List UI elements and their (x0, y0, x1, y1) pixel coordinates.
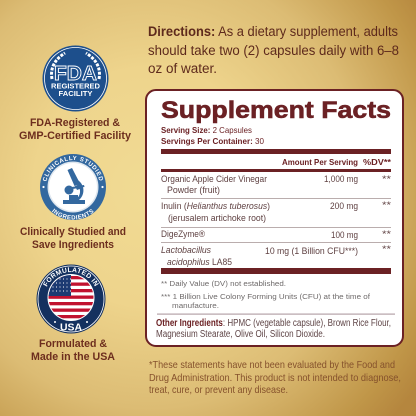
footnotes: *** 1 Billion Live Colony Forming Units (CFU) at the time of (161, 294, 370, 301)
heading: supplement facts: Supplement Facts (161, 97, 391, 124)
table: ingredients: 100 mg (331, 230, 358, 241)
table: ingredients: 1,000 mg (324, 174, 358, 185)
badge: FDA registered facility: REGISTERED (51, 82, 101, 90)
caption: clinically studied: Clinically Studied and (20, 226, 126, 238)
caption: FDA registered: GMP-Certified Facility (19, 130, 132, 142)
icon: microscope (63, 168, 85, 204)
table: ingredients: 10 mg (1 Billion CFU***) (265, 246, 358, 257)
directions text: should take two (2) capsules daily with 6–8 (148, 43, 399, 58)
table: ingredients: Amount Per Serving (282, 157, 358, 167)
table: ingredients: ** (382, 229, 391, 240)
directions text: Directions: As a dietary supplement, adults (148, 24, 398, 39)
other ingredients: Magnesium Stearate, Olive Oil, Silicon Dioxide. (156, 329, 325, 340)
icon: US flag (48, 275, 94, 318)
caption: FDA registered: FDA-Registered & (30, 117, 120, 129)
badge: clinically studied ingredients: CLINICALLY STUDIED (42, 156, 103, 181)
serving info: Servings Per Container: 30 (161, 136, 264, 146)
badge: FDA registered facility: FDA (54, 63, 97, 85)
badge: formulated in USA (36, 264, 106, 334)
directions text (148, 24, 399, 76)
panel: supplement facts (146, 90, 403, 346)
table: ingredients (161, 149, 392, 274)
caption: clinically studied: Save Ingredients (32, 239, 114, 251)
caption: formulated in USA: Made in the USA (31, 351, 115, 363)
footnotes (161, 281, 370, 310)
table: ingredients: Inulin (Helianthus tuberosus) (161, 201, 270, 212)
disclaimer: treat, cure, or prevent any disease. (149, 384, 288, 396)
badge: formulated in USA: USA (60, 322, 82, 334)
table: ingredients: ** (382, 174, 391, 185)
table: ingredients: Lactobacillus (161, 245, 211, 256)
badge: formulated in USA: FORMULATED IN (43, 267, 99, 287)
badge: clinically studied ingredients (40, 154, 106, 220)
serving info: Serving Size: 2 Capsules (161, 125, 252, 135)
table: ingredients: Powder (fruit) (167, 185, 220, 196)
table: ingredients: (jerusalem artichoke root) (168, 213, 266, 224)
caption: clinically studied (20, 226, 126, 251)
caption: formulated in USA (31, 338, 115, 363)
badge: clinically studied ingredients: INGREDIENTS (52, 208, 94, 220)
disclaimer (149, 359, 401, 396)
table: ingredients: 200 mg (330, 201, 358, 212)
table: ingredients: ** (382, 244, 391, 255)
table: ingredients: ** (382, 200, 391, 211)
caption: formulated in USA: Formulated & (39, 338, 107, 350)
footnotes: ** Daily Value (DV) not established. (161, 281, 286, 288)
directions text: oz of water. (148, 61, 217, 76)
footnotes: manufacture. (172, 303, 219, 310)
badge: FDA registered facility (42, 46, 108, 112)
other ingredients (156, 318, 391, 340)
serving info (161, 125, 264, 146)
badge: FDA registered facility: FACILITY (58, 91, 93, 98)
table: ingredients: Organic Apple Cider Vinegar (161, 174, 267, 185)
table: ingredients: %DV** (363, 157, 392, 167)
table: ingredients: DigeZyme® (161, 229, 205, 240)
table: ingredients: acidophilus LA85 (167, 257, 232, 268)
caption: FDA registered (19, 117, 132, 142)
